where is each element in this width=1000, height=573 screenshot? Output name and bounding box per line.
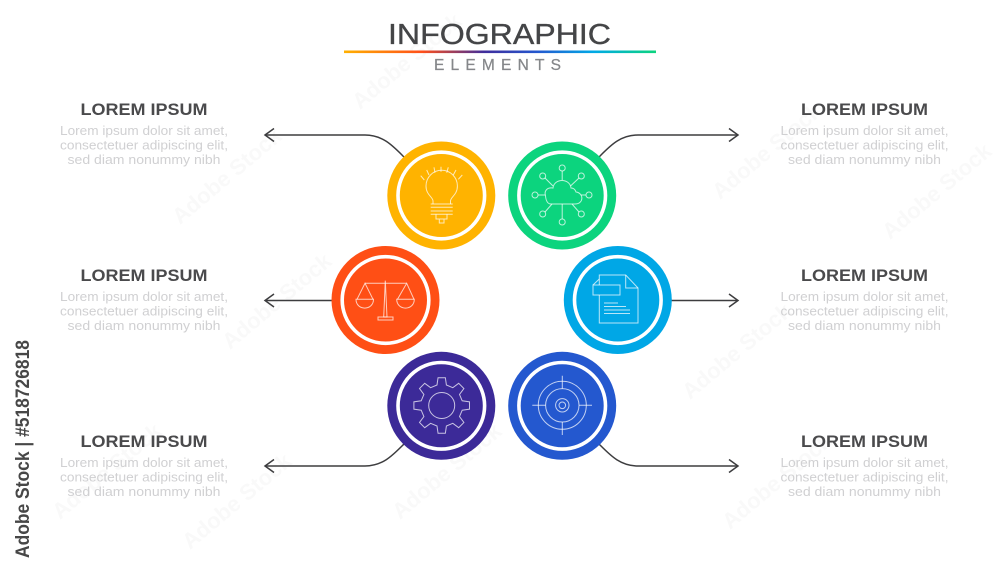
text block: top right: LOREM IPSUM <box>801 101 928 119</box>
stock credit text: Adobe Stock | #518726818 <box>13 340 34 558</box>
text block: middle right: LOREM IPSUM <box>801 267 928 285</box>
text block: bottom left <box>60 433 228 499</box>
panel: purple circle <box>387 352 495 460</box>
panel: green circle <box>508 142 616 250</box>
icon: cloud network <box>532 165 592 225</box>
watermark pattern: Adobe Stock <box>387 418 507 524</box>
text block: bottom right: LOREM IPSUM <box>801 433 928 451</box>
text block: bottom right: consectetuer adipiscing elit, <box>780 470 948 484</box>
text block: top left: sed diam nonummy nibh <box>68 153 221 167</box>
text block: top left: LOREM IPSUM <box>80 101 208 119</box>
watermark pattern: Adobe Stock <box>177 448 297 554</box>
watermark pattern: Adobe Stock <box>47 418 167 524</box>
arrow: middle right <box>671 294 738 307</box>
text block: middle right: sed diam nonummy nibh <box>788 319 941 333</box>
text block: top left: Lorem ipsum dolor sit amet, <box>60 124 228 138</box>
text block: middle left <box>60 267 228 333</box>
watermark pattern: Adobe Stock <box>677 298 797 404</box>
arrow: bottom right <box>599 444 738 472</box>
text block: bottom left: consectetuer adipiscing elit, <box>60 470 228 484</box>
text block: top right: sed diam nonummy nibh <box>788 153 941 167</box>
title <box>344 19 656 74</box>
watermark pattern: Adobe Stock <box>877 138 997 244</box>
arrow: middle left <box>265 294 332 307</box>
text block: middle left: LOREM IPSUM <box>80 267 208 285</box>
text block: top left: consectetuer adipiscing elit, <box>60 138 228 152</box>
text block: middle right <box>780 267 948 333</box>
text block: top right: Lorem ipsum dolor sit amet, <box>780 124 948 138</box>
title: INFOGRAPHIC <box>388 19 611 51</box>
panel: dark blue circle <box>508 352 616 460</box>
text block: middle left: consectetuer adipiscing elit, <box>60 304 228 318</box>
icon: document <box>593 275 638 323</box>
watermark pattern: Adobe Stock <box>717 428 837 534</box>
text block: top right: consectetuer adipiscing elit, <box>780 138 948 152</box>
text block: bottom right: Lorem ipsum dolor sit amet, <box>780 456 948 470</box>
arrow: top right <box>599 128 738 157</box>
watermark pattern: Adobe Stock <box>707 98 827 204</box>
text block: bottom left: sed diam nonummy nibh <box>68 485 221 499</box>
icon: target <box>532 376 592 435</box>
panel: yellow circle <box>387 142 495 250</box>
text block: bottom left: Lorem ipsum dolor sit amet, <box>60 456 228 470</box>
text block: bottom left: LOREM IPSUM <box>80 433 208 451</box>
icon: light bulb <box>421 167 462 223</box>
text block: middle left: sed diam nonummy nibh <box>68 319 221 333</box>
watermark pattern: Adobe Stock <box>347 8 467 114</box>
arrow: bottom left <box>265 444 404 472</box>
text block: middle left: Lorem ipsum dolor sit amet, <box>60 290 228 304</box>
text block: bottom right <box>780 433 948 499</box>
icon: balance scales <box>356 281 414 320</box>
watermark pattern: Adobe Stock <box>167 123 287 229</box>
panel: light blue circle <box>564 246 672 354</box>
title: ELEMENTS <box>434 57 561 74</box>
panel: red circle <box>332 246 440 354</box>
text block: top left <box>60 101 228 167</box>
text block: bottom right: sed diam nonummy nibh <box>788 485 941 499</box>
arrow: top left <box>265 128 404 157</box>
text block: middle right: consectetuer adipiscing elit, <box>780 304 948 318</box>
text block: top right <box>780 101 948 167</box>
icon: gear <box>414 378 470 433</box>
text block: middle right: Lorem ipsum dolor sit amet, <box>780 290 948 304</box>
watermark pattern: Adobe Stock <box>217 248 337 354</box>
